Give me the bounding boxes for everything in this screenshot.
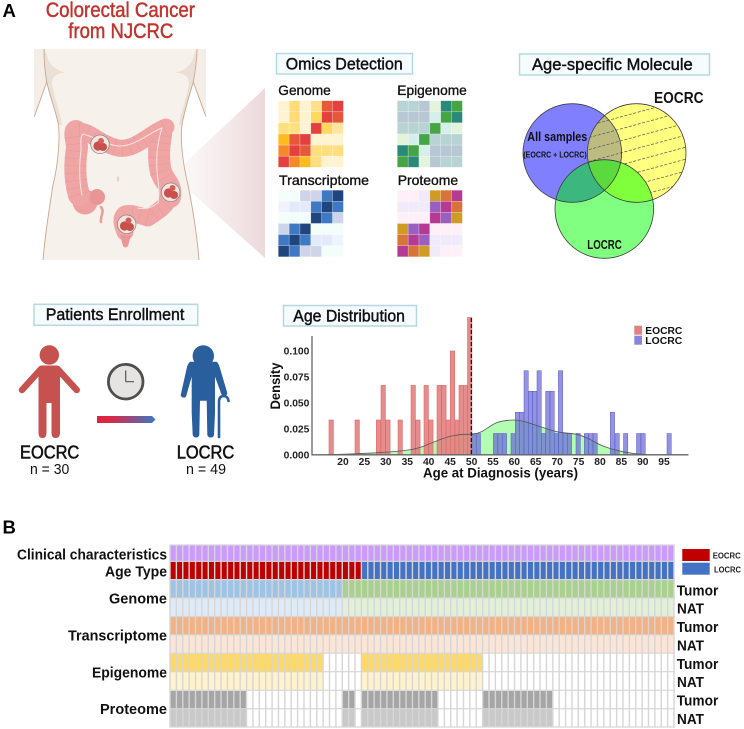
label: EOCRC n = 30: n = 30	[30, 462, 69, 478]
label: LOCRC n = 49: LOCRC	[177, 442, 234, 462]
x tick labels: 60	[509, 457, 520, 468]
row labels: left: Proteome	[100, 702, 167, 718]
row labels: left: Epigenome	[92, 665, 167, 681]
panel label B: B	[2, 516, 16, 538]
tumor: descending colon	[161, 183, 180, 202]
label: EOCRC n = 30: EOCRC	[20, 442, 79, 462]
y axis title: Density	[268, 362, 283, 410]
density curve	[328, 420, 647, 455]
tumor: sigmoid	[117, 215, 136, 234]
heatmap: Proteome	[397, 190, 462, 257]
legend: age type: EOCRC	[713, 552, 741, 561]
row: genome tumor	[170, 580, 674, 598]
row labels: left	[17, 547, 167, 718]
chart legend	[634, 326, 682, 347]
row labels: right	[677, 583, 719, 728]
label: LOCRC n = 49	[177, 442, 234, 478]
chart legend: EOCRC	[645, 326, 682, 337]
row labels: left: Transcriptome	[68, 629, 167, 645]
row: transcriptome tumor	[170, 617, 674, 635]
y tick labels: 0.025	[284, 424, 310, 436]
title: Colorectal Cancer from NJCRC: from NJCRC	[68, 19, 173, 43]
x tick labels: 40	[423, 457, 435, 468]
y tick labels: 0.050	[284, 398, 310, 410]
Venn label: All samples: All samples	[527, 129, 587, 144]
row: epigenome tumor	[170, 654, 483, 672]
heatmap: Transcriptome	[278, 190, 343, 257]
x tick labels: 25	[359, 457, 370, 468]
axes	[312, 336, 688, 455]
x tick labels	[337, 457, 670, 468]
row labels: right: Tumor	[677, 657, 719, 673]
row: proteome tumor	[170, 691, 553, 708]
x tick labels: 35	[402, 457, 413, 468]
chart legend: LOCRC	[645, 336, 682, 347]
x tick labels: 20	[337, 457, 349, 468]
chart: age distribution histogram	[268, 318, 688, 480]
y tick labels: 0.100	[284, 346, 310, 358]
y tick labels	[284, 346, 310, 462]
row: epigenome NAT	[170, 672, 483, 690]
row labels: right: Tumor	[677, 583, 719, 599]
x tick labels: 90	[637, 457, 649, 468]
row labels: right: NAT	[677, 675, 704, 691]
zoom wedge from colon to omics panel	[172, 88, 265, 258]
row: genome NAT	[170, 598, 674, 616]
heatmap: Epigenome	[397, 101, 462, 167]
LOCRC bars	[472, 371, 671, 455]
Venn label: LOCRC: LOCRC	[587, 238, 622, 252]
heading: Age-specific Molecule: Age-specific Molecule	[532, 55, 693, 74]
chart: Venn diagram	[523, 90, 704, 258]
label: Proteome heatmap: Proteome	[398, 172, 458, 188]
x tick labels: 75	[573, 457, 585, 468]
illustration: torso with colon and tumors	[34, 49, 206, 260]
colon	[72, 127, 170, 248]
arrow: EOCRC to LOCRC	[97, 416, 156, 423]
cutoff line at age 50	[470, 318, 472, 455]
y tick labels: 0.075	[284, 372, 310, 384]
label: Genome heatmap: Genome	[278, 82, 331, 98]
title: Colorectal Cancer from NJCRC	[46, 0, 195, 43]
label: LOCRC n = 49: n = 49	[186, 462, 226, 478]
row labels: right: NAT	[677, 638, 704, 654]
label: Epigenome heatmap: Epigenome	[397, 82, 467, 98]
Venn label: EOCRC + LOCRC: (EOCRC + LOCRC)	[523, 150, 587, 160]
x tick labels: 65	[530, 457, 542, 468]
x tick labels: 70	[551, 457, 563, 468]
row labels: left: Age Type	[105, 565, 167, 581]
row labels: right: NAT	[677, 602, 704, 618]
panel: sample availability matrix	[169, 545, 676, 727]
row labels: left: Genome	[109, 592, 167, 608]
x tick labels: 50	[466, 457, 478, 468]
torso background	[34, 49, 206, 260]
icon: young patient	[22, 345, 77, 438]
row: clinical characteristics	[170, 545, 674, 561]
grid lines	[169, 545, 676, 727]
x axis title: Age at Diagnosis (years)	[423, 466, 578, 480]
tumor: hepatic flexure	[91, 135, 109, 154]
row labels: right: NAT	[677, 712, 704, 728]
density curve outline	[328, 420, 647, 455]
label: EOCRC n = 30	[20, 442, 79, 478]
row: proteome NAT	[170, 709, 553, 727]
icon: elderly patient with cane	[181, 345, 228, 438]
x tick labels: 85	[616, 457, 627, 468]
y tick labels: 0.000	[284, 450, 310, 462]
legend: age type: LOCRC	[714, 566, 741, 575]
Venn label: EOCRC: EOCRC	[654, 90, 704, 107]
label: Transcriptome heatmap: Transcriptome	[279, 172, 369, 188]
row labels: right: Tumor	[677, 694, 719, 710]
x tick labels: 30	[380, 457, 392, 468]
heading: Omics Detection: Omics Detection	[286, 54, 403, 74]
panel label A: A	[2, 0, 16, 21]
row: transcriptome NAT	[170, 635, 674, 653]
icon: clock	[108, 364, 143, 399]
heading: Patients Enrollment: Patients Enrollment	[46, 305, 185, 324]
row: age type	[170, 562, 674, 579]
x tick labels: 55	[487, 457, 499, 468]
legend: age type	[682, 549, 741, 575]
row labels: left: Clinical characteristics	[17, 547, 167, 563]
x tick labels: 80	[594, 457, 606, 468]
heading: Age Distribution: Age Distribution	[293, 306, 405, 325]
EOCRC bars	[329, 318, 472, 455]
x tick labels: 95	[658, 457, 670, 468]
heatmap: Genome	[278, 101, 343, 167]
x tick labels: 45	[444, 457, 456, 468]
row labels: right: Tumor	[677, 620, 719, 636]
